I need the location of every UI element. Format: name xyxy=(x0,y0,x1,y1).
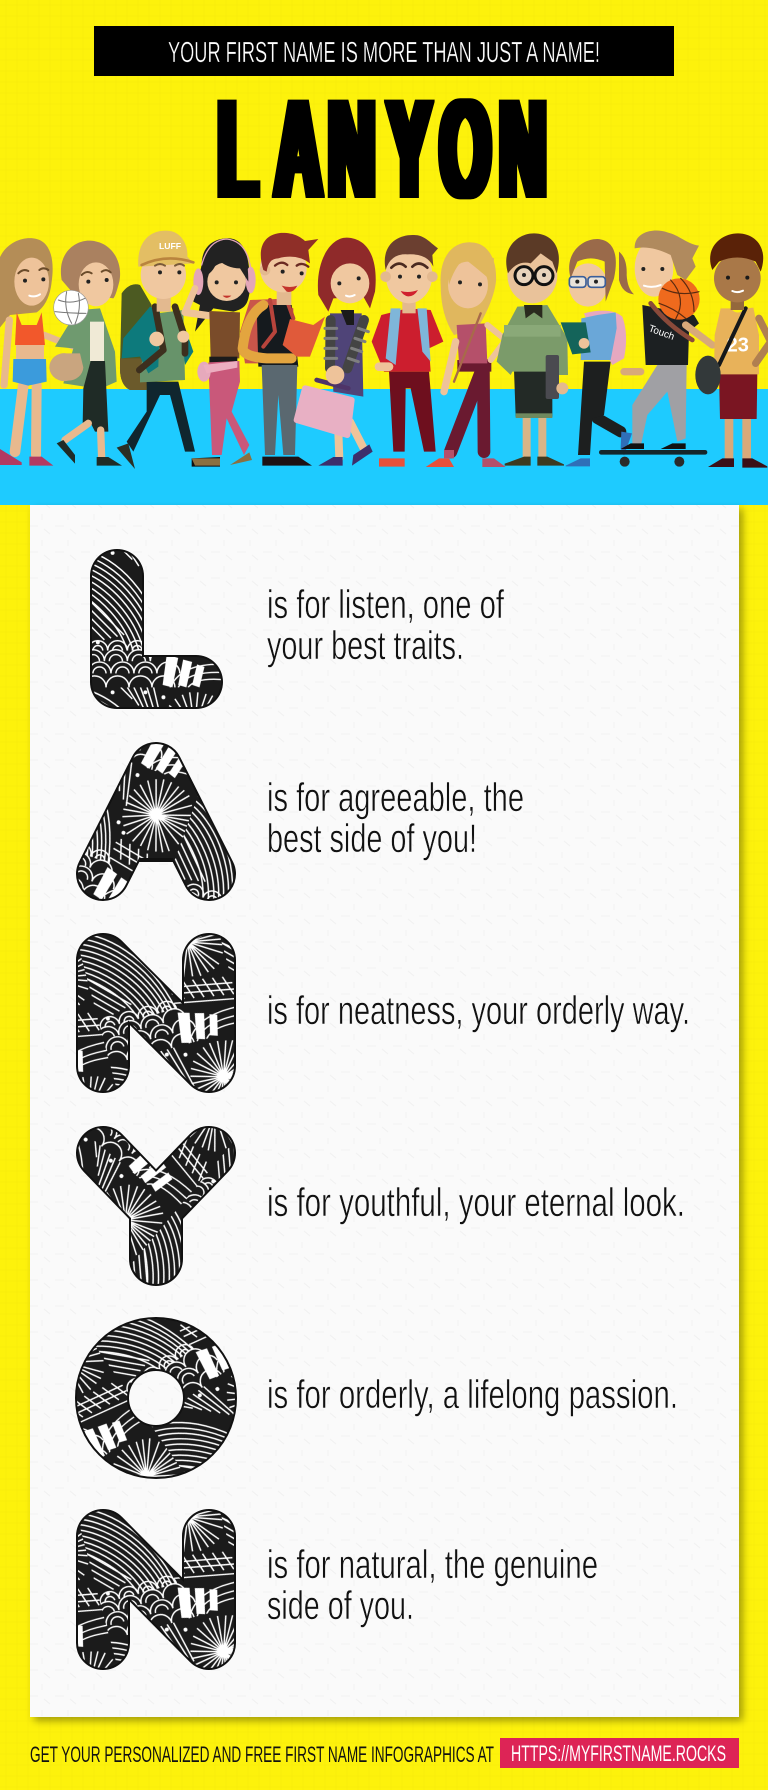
person 12: boy in yellow tank with bag xyxy=(695,233,768,468)
text: A line: best side of you! xyxy=(267,817,477,861)
person 6: girl in purple vest with pink bag xyxy=(297,238,376,466)
text: A line: is for agreeable, the xyxy=(267,776,524,820)
text: N line second: is for natural, the genuine xyxy=(267,1543,598,1587)
text: L line: your best traits. xyxy=(267,624,464,668)
blue floor band xyxy=(0,389,768,505)
header banner xyxy=(94,26,674,76)
row: Y xyxy=(103,1153,685,1259)
text: N line second xyxy=(267,1543,598,1628)
footer call to action: GET YOUR PERSONALIZED AND FREE FIRST NAME INFOGRAPHICS AT xyxy=(30,1742,494,1767)
person 7: boy in red shirt xyxy=(372,235,454,467)
title: LANYON: LANYON xyxy=(218,71,546,228)
letter O ornament xyxy=(102,1344,210,1452)
row: N xyxy=(103,960,690,1066)
person 5: boy with orange book xyxy=(240,233,325,466)
text: L line: is for listen, one of xyxy=(267,583,505,627)
text: N line second: side of you. xyxy=(267,1584,414,1628)
letter N ornament second xyxy=(103,1536,209,1643)
person 3: backpacker in cap xyxy=(117,231,220,469)
row: O xyxy=(102,1344,678,1452)
letter N ornament xyxy=(103,960,209,1066)
text: A line xyxy=(267,776,524,861)
row: L xyxy=(117,576,505,682)
person 10: girl with glasses, ponytail and tablet xyxy=(561,239,634,466)
white content panel xyxy=(30,505,739,1717)
person 11: skateboarder with basketball xyxy=(599,231,712,467)
person 12: boy in yellow tank with bag: 23 xyxy=(727,335,749,357)
person 1: girl in orange top xyxy=(0,238,78,466)
person 4: girl with headphones xyxy=(185,238,256,466)
person 3: backpacker in cap: LUFF xyxy=(159,241,181,251)
person 8: blonde girl with maroon jeans xyxy=(441,242,506,467)
letter Y ornament xyxy=(103,1153,209,1259)
illustration: group of twelve young people xyxy=(0,231,768,469)
row: N second xyxy=(103,1536,598,1643)
person 2: girl in green jacket with volleyball xyxy=(49,241,122,466)
row: A xyxy=(103,769,524,874)
person 9: boy with glasses and laptop xyxy=(497,233,568,466)
letter A ornament xyxy=(103,769,209,874)
letter L ornament xyxy=(117,576,196,682)
person 11: skateboarder with basketball: Touch xyxy=(647,323,676,343)
text: L line xyxy=(267,583,505,668)
